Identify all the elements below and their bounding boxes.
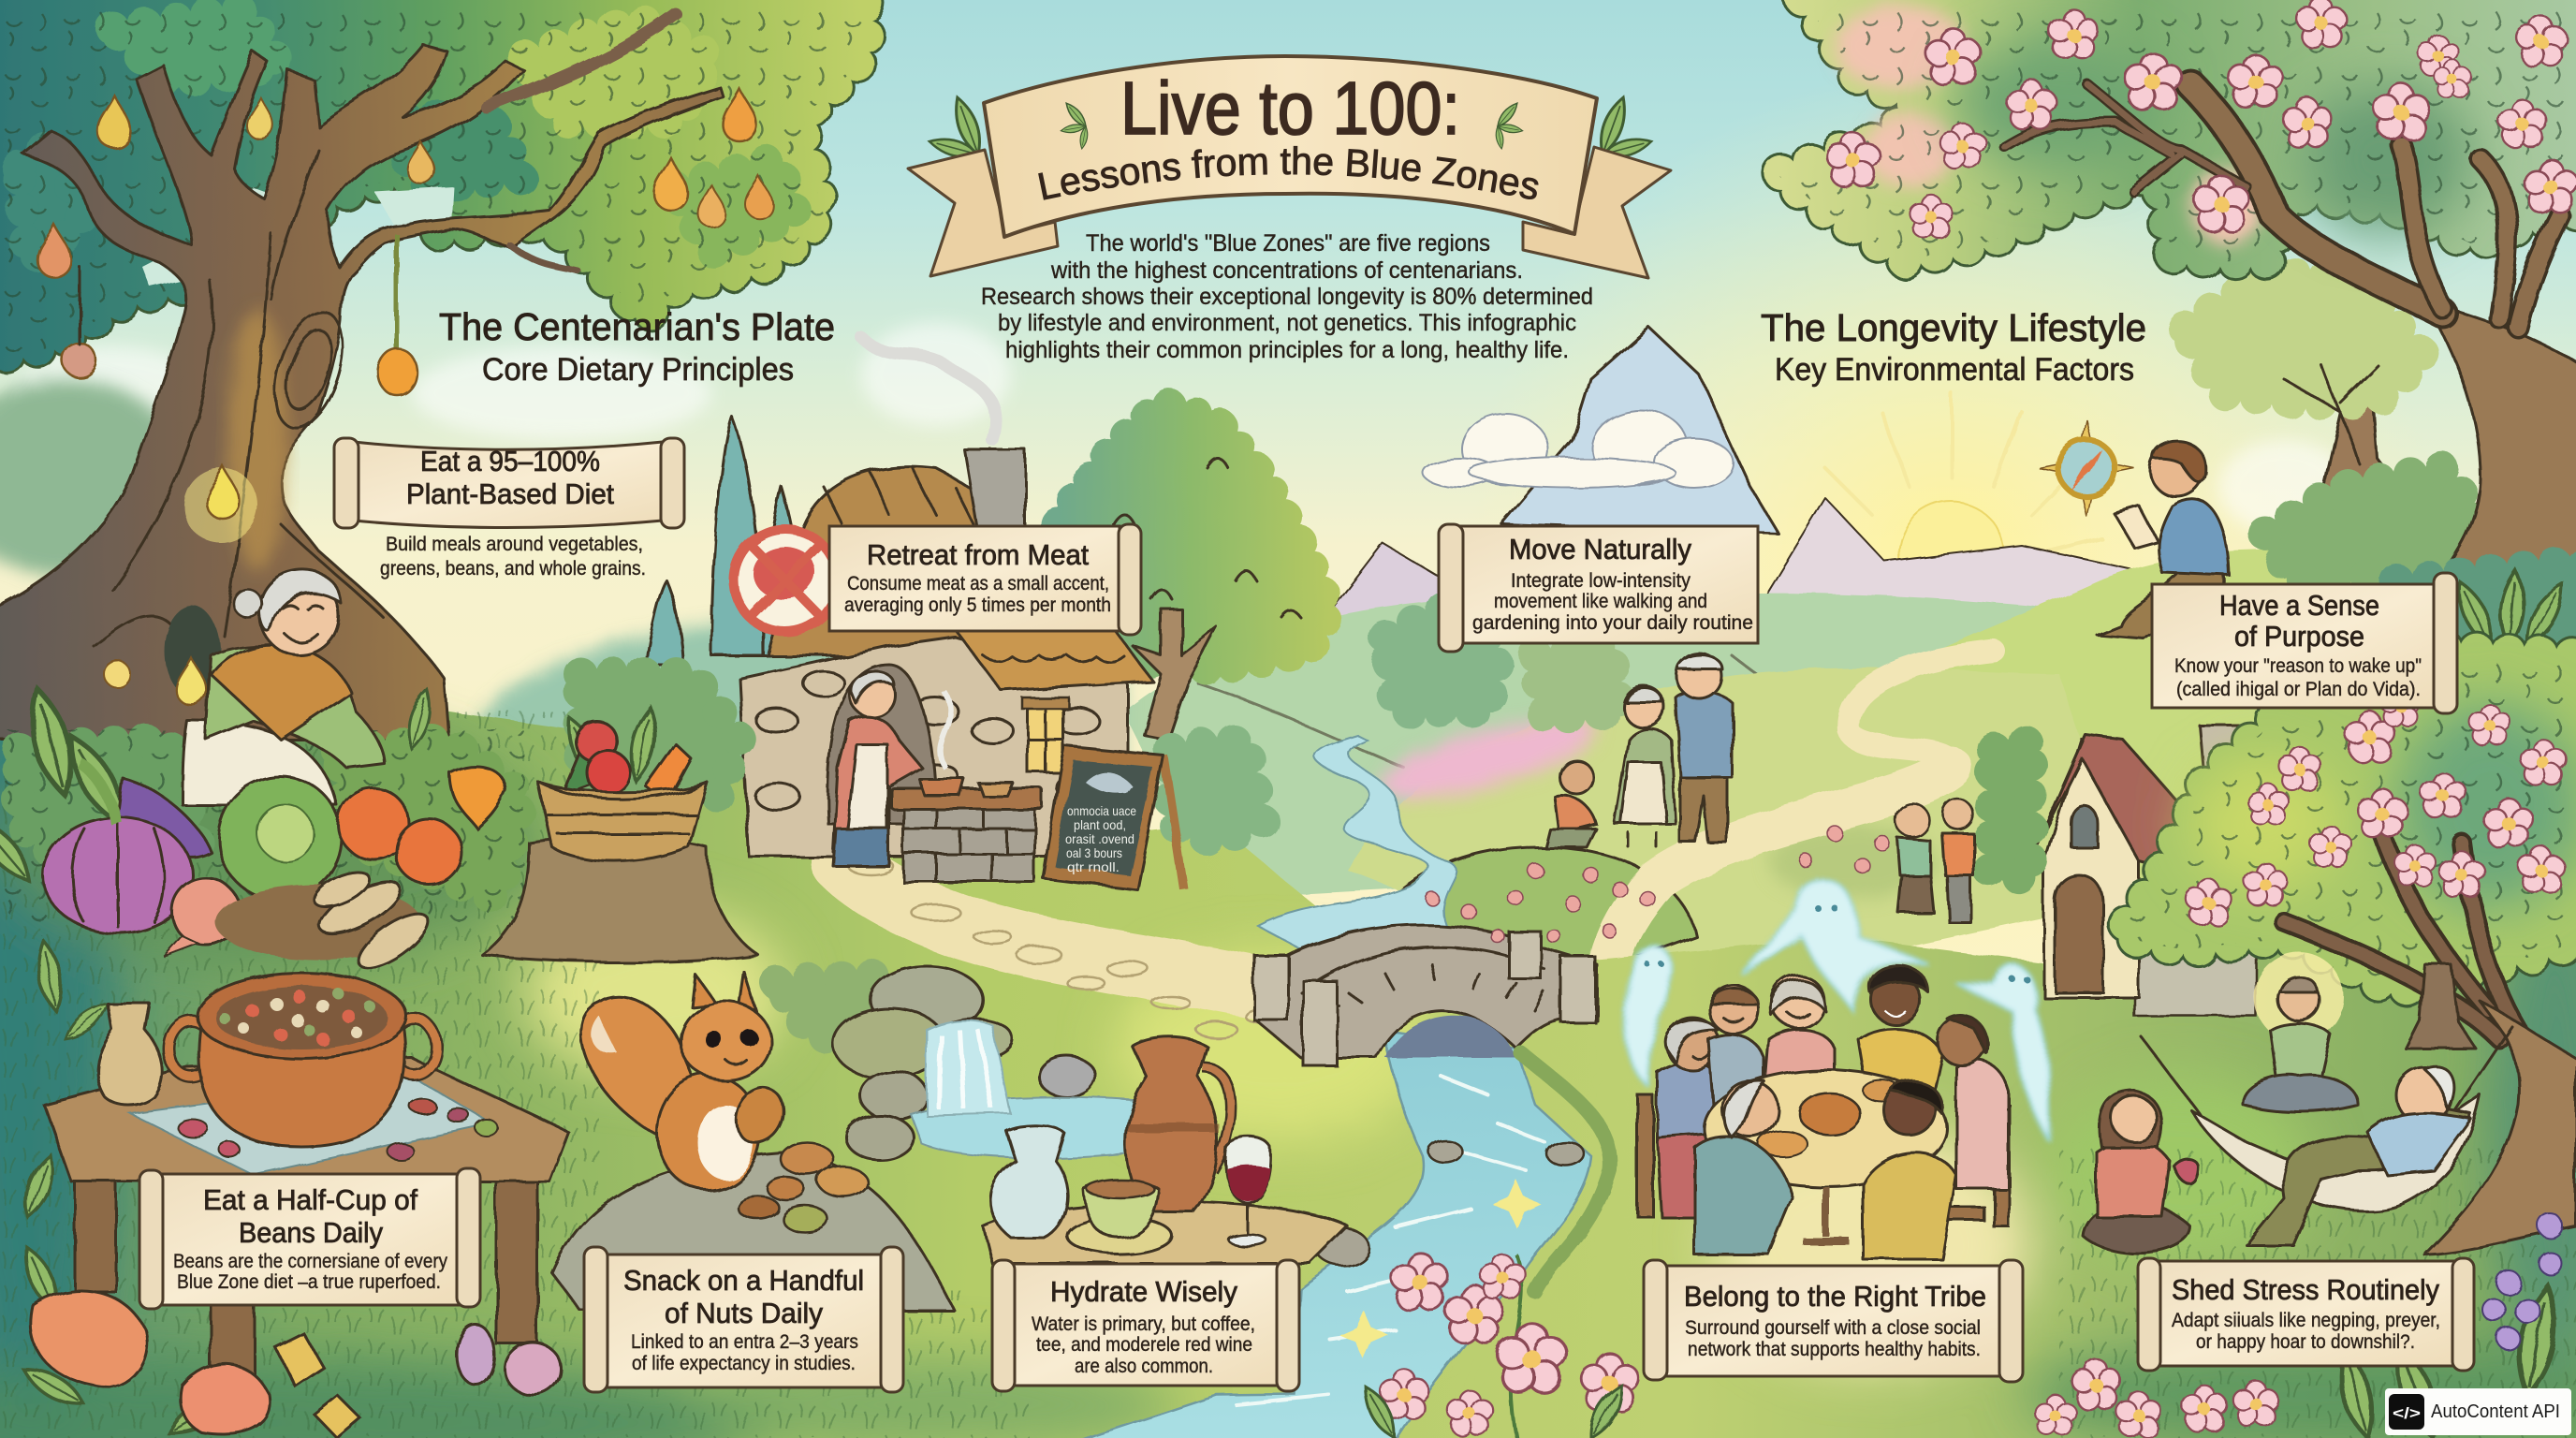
panel: plant-based diet: Plant-Based Diet: [406, 477, 614, 510]
middle tree trunk: [1133, 609, 1217, 740]
bean plant by edge: [17, 940, 240, 1438]
panel: retreat from meat: averaging only 5 times per month: [844, 594, 1111, 616]
sun glow: [1465, 66, 2438, 1039]
right middle tree canopy: [2185, 271, 2424, 403]
sun rays: [1802, 393, 2101, 552]
river highlights: [1236, 1077, 1544, 1404]
middle tree canopy: [1058, 403, 1329, 669]
banner body: [984, 56, 1597, 237]
left canopy leaf marks: [0, 0, 866, 360]
cypress trees: [646, 417, 803, 665]
heading: the centenarian's plate: [439, 305, 835, 388]
woman with wine: [2083, 1091, 2198, 1253]
cabbage: [218, 776, 342, 900]
heading: the longevity lifestyle: Key Environmental Factors: [1775, 352, 2134, 388]
small jar: [97, 1004, 163, 1106]
right lower trunk: [2424, 1002, 2576, 1255]
table gathering: [1638, 966, 2009, 1259]
sky clouds: [9, 323, 2349, 534]
basket of vegetables: [538, 705, 707, 861]
text: plant-based diet detail: greens, beans, and whole grains.: [380, 558, 646, 580]
left tree canopy: [0, 0, 866, 360]
meadow flower wash: [1372, 702, 1938, 899]
far mountains: [1310, 498, 2181, 674]
panel: half-cup of beans: Eat a Half-Cup of: [203, 1183, 417, 1216]
river bank right: [1521, 1053, 1610, 1292]
blossom canopy colour wash: [2190, 702, 2576, 908]
right tree branches: [2005, 84, 2560, 328]
panel: sense of purpose: of Purpose: [2234, 620, 2364, 653]
compass: [2039, 419, 2134, 517]
heading: the centenarian's plate: The Centenarian's Plate: [439, 305, 835, 348]
left canopy light clumps: [19, 9, 796, 262]
left tree trunk and limbs: [0, 45, 723, 740]
panel: right tribe: network that supports healthy habits.: [1688, 1339, 1981, 1360]
chalkboard menu text: qtr rnoll.: [1067, 859, 1120, 874]
intro paragraph: highlights their common principles for a long, healthy life.: [1005, 337, 1569, 363]
right canopy leaf marks: [1777, 0, 2576, 262]
squirrel: [580, 972, 792, 1191]
small distant tree: [2406, 964, 2476, 1049]
colored root vegetables: [31, 1291, 561, 1438]
upper river: [1259, 735, 1460, 964]
diner left grey hair: [1657, 1018, 1732, 1217]
nuts on rock: [738, 1142, 867, 1232]
path cobbles: [848, 858, 1282, 1037]
banner sprig leaves: [928, 95, 1653, 162]
panel: sense of purpose: (called ihigal or Plan do Vida).: [2176, 679, 2421, 700]
chalkboard frame and board: [1043, 746, 1184, 889]
foreground flowers mid: [1356, 1253, 1639, 1438]
wall stones: [754, 671, 1099, 809]
badge: AutoContent API: AutoContent API: [2431, 1401, 2560, 1422]
chalkboard menu text: oal 3 bours: [1066, 845, 1122, 860]
chalkboard menu text: orasit .ovend: [1065, 831, 1134, 846]
canopy green wash: [1956, 37, 2471, 234]
river sparkles: [1339, 1180, 1541, 1359]
grandmother gardening: [183, 570, 384, 805]
meditating woman: [2243, 952, 2357, 1112]
thatch lines: [824, 468, 973, 524]
title banner: [906, 54, 1672, 279]
subtitle: Lessons from the Blue Zones: [1038, 146, 1539, 200]
clay bean pot: [168, 973, 436, 1147]
right middle tree branches: [2284, 365, 2378, 463]
badge: AutoContent API: </>: [2393, 1404, 2421, 1422]
intro paragraph: Research shows their exceptional longevity is 80% determined: [981, 284, 1593, 310]
diner front yellow: [1863, 1081, 1956, 1259]
stepping stones: [1316, 1140, 1584, 1266]
panel: hydrate wisely: Water is primary, but coffee,: [1032, 1313, 1255, 1335]
panel: half-cup of beans: Beans are the cornersiane of every: [173, 1251, 447, 1272]
panel: right tribe: Belong to the Right Tribe: [1684, 1280, 1986, 1313]
green tea cup: [1067, 1180, 1172, 1255]
right tree main limb: [2190, 84, 2443, 314]
roof tile scallops: [983, 655, 1123, 661]
panel: hydrate wisely: tee, and moderele red wine: [1036, 1334, 1252, 1356]
right top tree canopy: [1777, 0, 2576, 262]
diner back left: [1708, 985, 1764, 1105]
panel: move naturally: Integrate low-intensity: [1511, 570, 1690, 592]
cottage window: [1022, 697, 1069, 772]
heading: the longevity lifestyle: [1761, 306, 2146, 388]
gardener crouching: [1544, 760, 1596, 847]
glowing fruits: [37, 89, 772, 705]
ghosts: [1624, 880, 2050, 1142]
walking couple: [1615, 653, 1732, 847]
panel: half-cup of beans: Beans Daily: [239, 1216, 383, 1249]
woman cooking: [833, 672, 922, 866]
tomatoes and pepper: [338, 766, 505, 885]
chalkboard menu text: plant ood,: [1074, 817, 1126, 832]
chairs: [1638, 1095, 2009, 1226]
no meat icon: [734, 529, 837, 632]
ghost faces: [1645, 904, 2029, 983]
banner left tail: [908, 150, 1058, 276]
sun: [1899, 502, 2004, 607]
panel: shed stress: Shed Stress Routinely: [2172, 1273, 2439, 1306]
diner pink: [1764, 976, 1835, 1095]
meadow blooms: [1426, 826, 1889, 943]
meadow: [1348, 668, 2134, 974]
boy reading with compass: [2097, 441, 2230, 638]
winding path upper: [1849, 651, 1994, 768]
valley contour lines: [1198, 655, 1769, 768]
panel: half-cup of beans: Blue Zone diet –a true ruperfoed.: [177, 1271, 441, 1293]
panel: sense of purpose: [2152, 573, 2457, 713]
grass left of cottage: [580, 674, 739, 796]
intro paragraph: with the highest concentrations of centenarians.: [1050, 257, 1523, 284]
purple squash and eggplant: [43, 763, 211, 933]
panel: handful of nuts: of Nuts Daily: [665, 1297, 823, 1329]
stove and cooking pots: [891, 779, 1043, 882]
arched door: [2055, 875, 2103, 992]
heading: the centenarian's plate: Core Dietary Principles: [482, 352, 794, 388]
badge: AutoContent API: [2385, 1388, 2571, 1435]
small couple with child: [1895, 800, 1973, 922]
lower river: [1030, 1030, 1591, 1438]
panel: hydrate wisely: Hydrate Wisely: [1050, 1275, 1237, 1308]
diner right: [1938, 1015, 2008, 1189]
panel: retreat from meat: [829, 524, 1141, 635]
chalkboard menu text: [1065, 803, 1136, 874]
terracotta jug: [1126, 1037, 1230, 1212]
panel: move naturally: gardening into your daily routine: [1472, 612, 1753, 634]
panel: right tribe: [1644, 1260, 2023, 1382]
steam from pot: [940, 693, 951, 768]
canopy leaf marks: [2119, 646, 2576, 992]
meadow lower bank: [1367, 846, 1696, 974]
garden bushes: [0, 730, 524, 936]
wooden table: [44, 1058, 568, 1381]
cottage right stone annex: [2134, 936, 2256, 1016]
panel: retreat from meat: Retreat from Meat: [867, 538, 1089, 571]
heading: the longevity lifestyle: The Longevity Lifestyle: [1761, 306, 2146, 349]
cottage wall: [739, 637, 1128, 857]
stone bridge: [1254, 925, 1597, 1065]
intro paragraph: by lifestyle and environment, not genetics. This infographic: [998, 310, 1576, 336]
panel: shed stress: Adapt siiuals like negping, preyer,: [2172, 1310, 2440, 1331]
cottage roof back: [768, 466, 1048, 655]
right lower blossom canopy: [2119, 646, 2576, 992]
distant hills left: [0, 379, 1123, 843]
squirrel rock: [552, 1152, 955, 1311]
panel: sense of purpose: Have a Sense: [2219, 589, 2379, 622]
chimney: [964, 449, 1025, 534]
text: plant-based diet detail: [380, 534, 646, 580]
right edge plants: [2396, 562, 2576, 683]
ground tonal washes: [0, 655, 2576, 1438]
panel: move naturally: Move Naturally: [1509, 533, 1691, 565]
winding path lower: [1605, 768, 1952, 983]
trunk amber light: [227, 309, 287, 571]
green valley: [1123, 593, 2247, 899]
right middle tree trunk: [2321, 393, 2406, 496]
panel: plant-based diet: Eat a 95–100%: [420, 445, 600, 477]
glass water pitcher: [990, 1125, 1067, 1238]
right tree trunk: [2424, 300, 2576, 599]
trunk hollow: [164, 606, 220, 696]
hydrate items ledge: [983, 1202, 1348, 1264]
chalkboard menu text: onmocia uace: [1067, 803, 1136, 818]
cottage right roof: [2032, 735, 2217, 866]
cottage right chimney: [2200, 726, 2239, 796]
bush behind cottage: [1989, 740, 2031, 880]
hammock: [2142, 1026, 2511, 1211]
panel: shed stress: or happy hoar to downshil?.: [2196, 1331, 2415, 1353]
panel: retreat from meat: Consume meat as a small accent,: [847, 573, 1109, 594]
chimney smoke: [861, 337, 996, 440]
hanging orange fruit: [376, 234, 417, 396]
radish: [164, 878, 240, 957]
panel: sense of purpose: Know your "reason to wake up": [2174, 655, 2422, 677]
foreground flowers right: [2034, 1283, 2563, 1438]
tall garden leaves: [0, 684, 436, 888]
title: Live to 100:: [1120, 66, 1460, 150]
right lower branches: [2284, 833, 2518, 1039]
stream pool: [911, 1097, 1133, 1158]
bushes mid valley: [1170, 599, 1619, 843]
panel: hydrate wisely: are also common.: [1075, 1356, 1213, 1377]
canopy pink washes: [1835, 5, 2265, 243]
diner yellow curly: [1858, 966, 1942, 1095]
panel: handful of nuts: Snack on a Handful: [623, 1264, 864, 1297]
grass hatch texture: [0, 712, 2576, 1438]
upper right twig: [487, 14, 676, 108]
trunk knot and bark: [94, 150, 384, 655]
tree stump: [482, 838, 758, 962]
panel: shed stress: [2138, 1258, 2474, 1371]
waterfall: [927, 1020, 1011, 1116]
panel: half-cup of beans: [139, 1168, 480, 1309]
panel: handful of nuts: [584, 1247, 903, 1392]
panel: handful of nuts: Linked to an entra 2–3 years: [631, 1331, 858, 1353]
panel: right tribe: Surround gourself with a close social: [1685, 1317, 1981, 1339]
panel: move naturally: [1439, 524, 1758, 652]
far bushes: [2265, 468, 2490, 580]
stone path to cottage: [842, 861, 1282, 992]
title sprig icons: [1061, 100, 1523, 150]
ground left and centre: [0, 674, 2576, 1438]
round table: [1704, 1070, 1947, 1240]
oven arch: [827, 665, 936, 824]
banner right tail: [1523, 147, 1671, 278]
panel: hydrate wisely: [992, 1260, 1299, 1391]
panel: move naturally: movement like walking and: [1494, 591, 1707, 612]
intro paragraph: [981, 230, 1593, 363]
gable window: [2071, 806, 2098, 847]
lower twig: [510, 245, 578, 271]
hillside under boy: [1825, 524, 2576, 899]
sweet potatoes in soil: [215, 865, 436, 977]
front roof tiles: [955, 629, 1153, 691]
intro paragraph: The world's "Blue Zones" are five regions: [1086, 230, 1490, 257]
right canopy blossoms: [1826, 0, 2576, 238]
mossy rocks: [833, 966, 1095, 1160]
panel: handful of nuts: of life expectancy in studies.: [632, 1353, 856, 1374]
diner front teal: [1694, 1081, 1793, 1255]
cottage right wall: [2043, 740, 2139, 997]
lower blossoms: [2187, 685, 2566, 925]
wine glass: [1225, 1137, 1270, 1246]
text: plant-based diet detail: Build meals around vegetables,: [386, 534, 643, 555]
panel: plant-based diet: [334, 438, 684, 528]
scattered beans: [178, 1099, 498, 1160]
left canopy sky gaps: [142, 187, 454, 286]
grass clumps: [777, 974, 899, 1039]
blue mountain with clouds: [1423, 328, 1778, 534]
lilac plant: [2483, 1214, 2563, 1350]
man in hammock: [2247, 1066, 2471, 1245]
